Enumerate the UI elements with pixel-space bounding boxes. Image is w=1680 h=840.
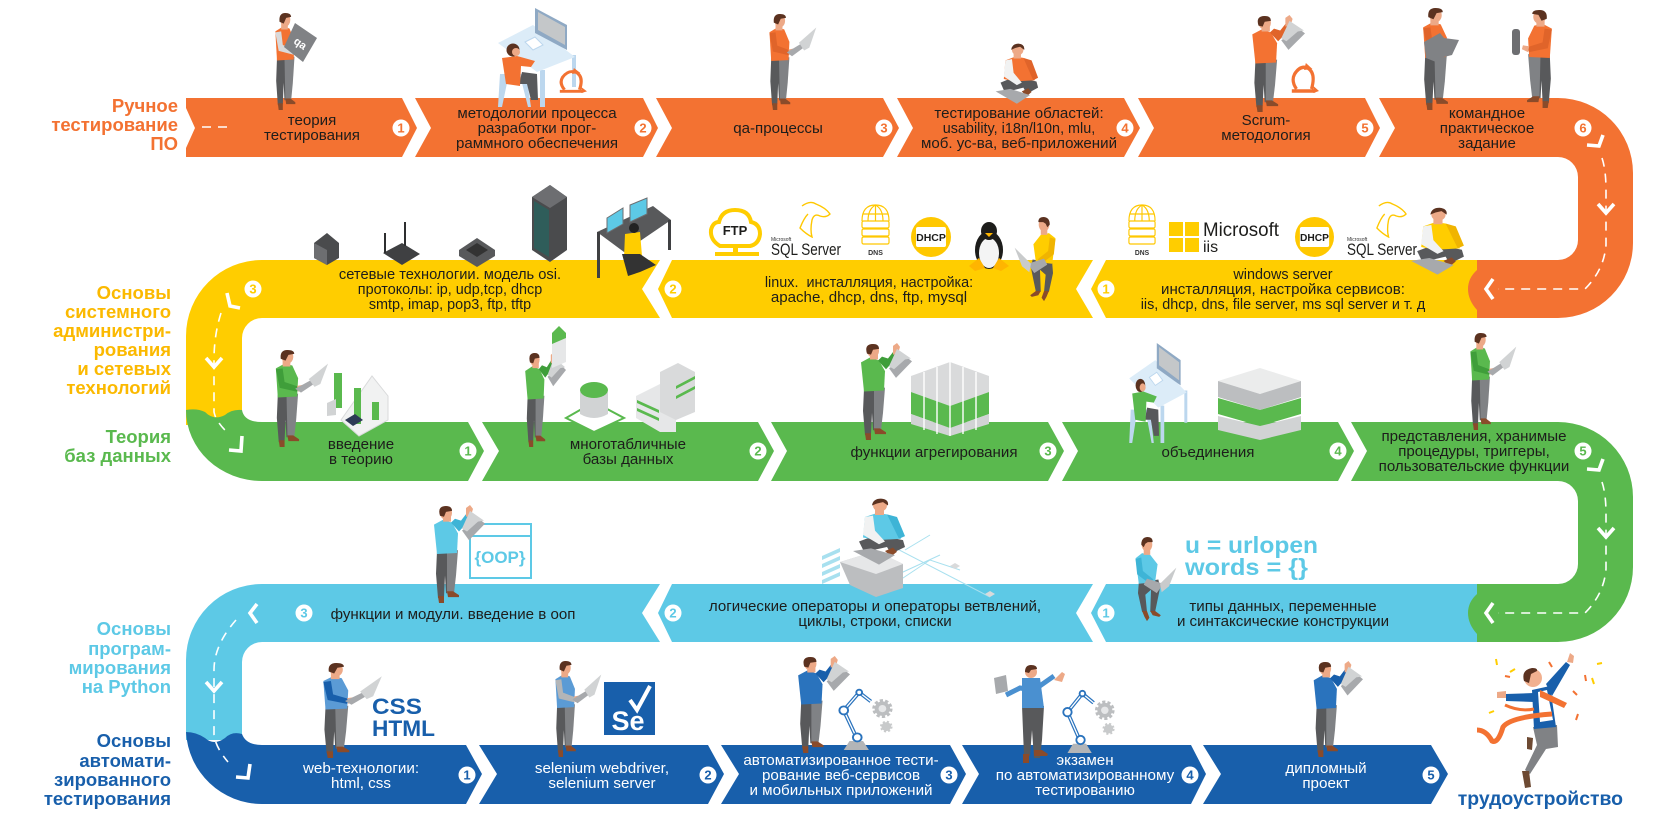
step 3.4 joins: объединения [1162, 444, 1254, 461]
step 3.5 views with U-turn [1351, 422, 1633, 642]
step 4.3 functions and modules: функции и модули. введение в ооп [331, 606, 575, 623]
icon: DHCP second [1295, 217, 1334, 257]
illustration: green man with laptop [276, 350, 328, 447]
heading: automated testing: тестирования [44, 788, 171, 809]
logo: SQL Server [771, 202, 841, 259]
step 3.3 aggregates: функции агрегирования [850, 444, 1018, 461]
icon: Linux penguin [969, 222, 1009, 271]
step 3.1 intro: в теорию [329, 451, 393, 468]
illustration: man with laptop and OOP window [434, 505, 531, 603]
logo: CSS HTML: HTML [372, 716, 435, 741]
illustration: man cross-legged with laptop [1411, 208, 1464, 275]
step 5.1 web technologies [186, 732, 482, 804]
heading: python basics: на Python [82, 676, 171, 697]
step 1.4 testing areas [897, 98, 1140, 157]
illustration: man with laptop and OOP window: {OOP} [474, 548, 526, 567]
step 1.6 team assignment with U-turn: практическое [1440, 120, 1534, 137]
step 3.5 views with U-turn: 5 [1579, 444, 1587, 458]
illustration: server stacks [636, 363, 695, 432]
step 1.4 testing areas: моб. ус-ва, веб-приложений [921, 135, 1117, 152]
step 3.5 views with U-turn: процедуры, триггеры, [1398, 443, 1550, 460]
illustration: man inspecting keyboard [861, 343, 912, 440]
code snippet: words = {} [1184, 554, 1308, 580]
illustration: man with laptop and robot [798, 656, 891, 753]
heading: system administration: и сетевых [77, 358, 172, 379]
illustration: man with laptop diploma [1314, 661, 1363, 757]
illustration: celebrating man with ribbon [1477, 653, 1602, 788]
step 5.3 automated testing of web services: автоматизированное тести- [743, 752, 939, 769]
step 4.3 functions and modules: 3 [300, 606, 308, 620]
illustration: man holding qa board: qa [291, 35, 309, 53]
illustration: man raising database stack [525, 326, 566, 447]
step 2.3 network technologies: 3 [249, 282, 257, 296]
heading: system administration: рования [94, 339, 171, 360]
step 2.1 windows server [1091, 260, 1480, 318]
step 2.2 linux [658, 260, 1093, 318]
illustration: router [383, 222, 420, 265]
icon: FTP cloud [711, 210, 760, 256]
illustration: network box [459, 238, 495, 267]
step 5.2 selenium: selenium server [548, 775, 656, 792]
step 5.1 web technologies: web-технологии: [302, 760, 419, 777]
step 3.3 aggregates: 3 [1044, 444, 1052, 458]
illustration: scrum man and loop [1252, 15, 1319, 112]
step 1.1 testing theory: 1 [397, 120, 405, 136]
illustration: man cross-legged on box [840, 499, 905, 597]
logo: Microsoft IIS: Microsoft [1203, 220, 1280, 241]
illustration: man with laptop css [323, 663, 382, 758]
logo: SQL Server: SQL Server [771, 240, 841, 259]
step 2.3 network technologies: smtp, imap, pop3, ftp, tftp [369, 297, 531, 313]
heading: manual testing: ПО [150, 133, 178, 154]
step 1.2 methodologies: методологии процесса [457, 105, 617, 122]
step 1.2 methodologies: разработки прог- [478, 120, 596, 137]
illustration: two men with puzzle [1423, 8, 1552, 110]
step 4.1 data types: и синтаксические конструкции [1177, 613, 1389, 630]
heading: database theory: баз данных [64, 445, 172, 466]
step 1.4 testing areas: usability, i18n/l10n, mlu, [943, 121, 1095, 137]
illustration: green man with laptop right [1470, 333, 1516, 430]
illustration: small server [314, 233, 339, 265]
step 1.3 qa processes: 3 [880, 120, 888, 136]
illustration: green desk [1129, 343, 1187, 443]
step 4.3 functions and modules [186, 584, 660, 740]
step 4.2 logical operators: логические операторы и операторы ветвлений, [709, 598, 1041, 615]
logo: CSS HTML: CSS [372, 694, 422, 719]
step 1.5 scrum: 5 [1361, 120, 1369, 136]
step 1.2 methodologies [415, 98, 658, 157]
step 5.3 automated testing of web services: рование веб-сервисов [762, 767, 920, 784]
illustration: examiner and robot [994, 665, 1113, 763]
step 5.5 diploma: проект [1302, 775, 1350, 792]
illustration: bar chart [327, 373, 388, 436]
step 5.5 diploma: дипломный [1285, 760, 1367, 777]
step 2.1 windows server: инсталляция, настройка сервисов: [1161, 281, 1405, 298]
step 5.4 exam: по автоматизированному [996, 767, 1175, 784]
heading: python basics: Основы [97, 618, 171, 639]
illustration: man with laptop selenium [555, 661, 601, 757]
step 4.1 data types: 1 [1102, 606, 1110, 620]
step 5.5 diploma [1203, 745, 1448, 804]
step 4.2 logical operators: 2 [669, 606, 677, 620]
logo: SQL Server second: Microsoft [1347, 237, 1368, 243]
road centre dashes and arrows [202, 127, 1614, 778]
step 3.5 views with U-turn: пользовательские функции [1379, 458, 1569, 475]
heading: system administration: технологий [66, 377, 171, 398]
step 1.5 scrum: Scrum- [1242, 112, 1290, 129]
icon: DHCP [911, 217, 951, 257]
step 1.1 testing theory: теория [288, 112, 336, 129]
road: row 5 automated testing (dark blue) [186, 732, 1448, 804]
step 5.2 selenium: selenium webdriver, [535, 760, 669, 777]
step 5.4 exam: тестированию [1035, 782, 1135, 799]
step 4.1 data types: типы данных, переменные [1189, 598, 1377, 615]
step 2.2 linux: apache, dhcp, dns, ftp, mysql [771, 289, 967, 306]
heading: manual testing: Ручное [112, 95, 178, 116]
step 3.4 joins: 4 [1334, 444, 1342, 458]
illustration: admin desk with two monitors [597, 198, 671, 278]
step 1.4 testing areas: тестирование областей: [934, 105, 1104, 122]
step 1.5 scrum: методология [1221, 127, 1311, 144]
step 5.1 web technologies: html, css [331, 775, 391, 792]
step 2.1 windows server: 1 [1102, 282, 1110, 296]
step 1.6 team assignment with U-turn: 6 [1579, 120, 1587, 136]
step 1.4 testing areas: 4 [1121, 120, 1129, 136]
step 5.4 exam: экзамен [1056, 752, 1114, 769]
heading: automated testing [44, 730, 171, 809]
code snippet [1184, 532, 1318, 580]
logo: SQL Server second [1347, 202, 1417, 259]
step 2.1 windows server: iis, dhcp, dns, file server, ms sql server и т. д [1141, 297, 1426, 313]
logo: Selenium: Se [611, 706, 645, 736]
step 1.3 qa processes: qa-процессы [733, 120, 823, 137]
step 2.3 network technologies: протоколы: ip, udp,tcp, dhcp [358, 282, 542, 298]
illustration: database chip [566, 382, 624, 432]
step 4.2 logical operators [658, 584, 1093, 642]
step 1.1 testing theory [186, 98, 417, 157]
icon: DNS [862, 205, 889, 257]
step 3.2 multi-table: 2 [754, 444, 762, 458]
step 1.6 team assignment with U-turn: командное [1449, 105, 1525, 122]
logo: CSS HTML [372, 694, 435, 741]
step 3.1 intro: введение [328, 436, 394, 453]
logo: Microsoft IIS: iis [1203, 239, 1218, 256]
step 5.2 selenium: 2 [704, 768, 712, 782]
heading: system administration: системного [65, 301, 171, 322]
road: row 1 manual testing (orange) [186, 98, 1633, 318]
logo: SQL Server second: SQL Server [1347, 240, 1417, 259]
heading: python basics [69, 618, 171, 697]
illustration: man holding qa board [275, 13, 317, 110]
step 3.2 multi-table [482, 422, 774, 481]
step 3.1 intro: 1 [464, 444, 472, 458]
step 3.4 joins [1062, 422, 1354, 481]
illustration: man sitting with laptop [1136, 537, 1176, 621]
icon: FTP cloud: FTP [723, 223, 748, 238]
step 2.2 linux: 2 [669, 282, 677, 296]
heading: automated testing: автомати- [79, 750, 171, 771]
illustration: cube of blocks [911, 362, 989, 436]
step 3.5 views with U-turn: представления, хранимые [1381, 428, 1567, 445]
step 3.2 multi-table: базы данных [583, 451, 674, 468]
step 5.3 automated testing of web services [721, 745, 966, 804]
step 3.1 intro [186, 409, 484, 481]
road: row 3 database theory (green) [186, 409, 1633, 642]
illustration: squatting man [996, 44, 1038, 104]
step 2.1 windows server: windows server [1232, 267, 1333, 283]
step 1.3 qa processes [656, 98, 899, 157]
step 2.2 linux: linux. инсталляция, настройка: [765, 275, 973, 291]
heading: system administration: администри- [53, 320, 171, 341]
logo: Microsoft IIS [1169, 220, 1280, 256]
step 1.2 methodologies: 2 [639, 120, 647, 136]
heading: database theory: Теория [106, 426, 171, 447]
illustration: layered stack [1218, 368, 1301, 440]
step 1.2 methodologies: раммного обеспечения [456, 135, 618, 152]
step 5.4 exam [962, 745, 1206, 804]
illustration: server rack [532, 185, 567, 262]
step 5.2 selenium [479, 745, 724, 804]
step 5.5 diploma: 5 [1427, 768, 1435, 782]
step 1.6 team assignment with U-turn [1379, 98, 1633, 318]
road: row 2 system administration (yellow) [186, 260, 1480, 425]
logo: SQL Server: Microsoft [771, 237, 792, 243]
illustration: man with laptop [769, 14, 816, 110]
heading: automated testing: Основы [97, 730, 171, 751]
heading: database theory [64, 426, 172, 466]
step 1.1 testing theory: тестирования [264, 127, 360, 144]
heading: manual testing [51, 95, 178, 154]
step 3.3 aggregates [771, 422, 1064, 481]
step 5.1 web technologies: 1 [463, 768, 471, 782]
illustration: circuit lines [880, 535, 995, 597]
step 5.3 automated testing of web services: 3 [945, 768, 953, 782]
step 2.3 network technologies [186, 260, 660, 425]
step 3.2 multi-table: многотабличные [570, 436, 686, 453]
heading: python basics: мирования [69, 657, 171, 678]
road: row 4 python basics (light blue) [186, 584, 1480, 740]
logo: Selenium [604, 682, 655, 736]
step 4.1 data types [1091, 584, 1480, 642]
heading: automated testing: зированного [54, 769, 171, 790]
illustration: yellow man sitting with laptop [1015, 217, 1055, 301]
code snippet: u = urlopen [1185, 532, 1318, 558]
step 4.2 logical operators: циклы, строки, списки [798, 613, 952, 630]
heading: manual testing: тестирование [51, 114, 178, 135]
step 1.6 team assignment with U-turn: задание [1458, 135, 1516, 152]
heading: python basics: програм- [88, 638, 171, 659]
illustration: stripe stack icon [822, 548, 840, 584]
step 5.3 automated testing of web services: и мобильных приложений [749, 782, 933, 799]
illustration: desk with orange loop [498, 8, 587, 107]
heading: employment: трудоустройство [1458, 788, 1623, 810]
step 1.5 scrum [1138, 98, 1380, 157]
heading: system administration: Основы [97, 282, 171, 303]
step 2.3 network technologies: сетевые технологии. модель osi. [339, 267, 561, 283]
step 5.4 exam: 4 [1186, 768, 1194, 782]
icon: DNS second [1129, 205, 1155, 257]
heading: system administration [53, 282, 172, 398]
